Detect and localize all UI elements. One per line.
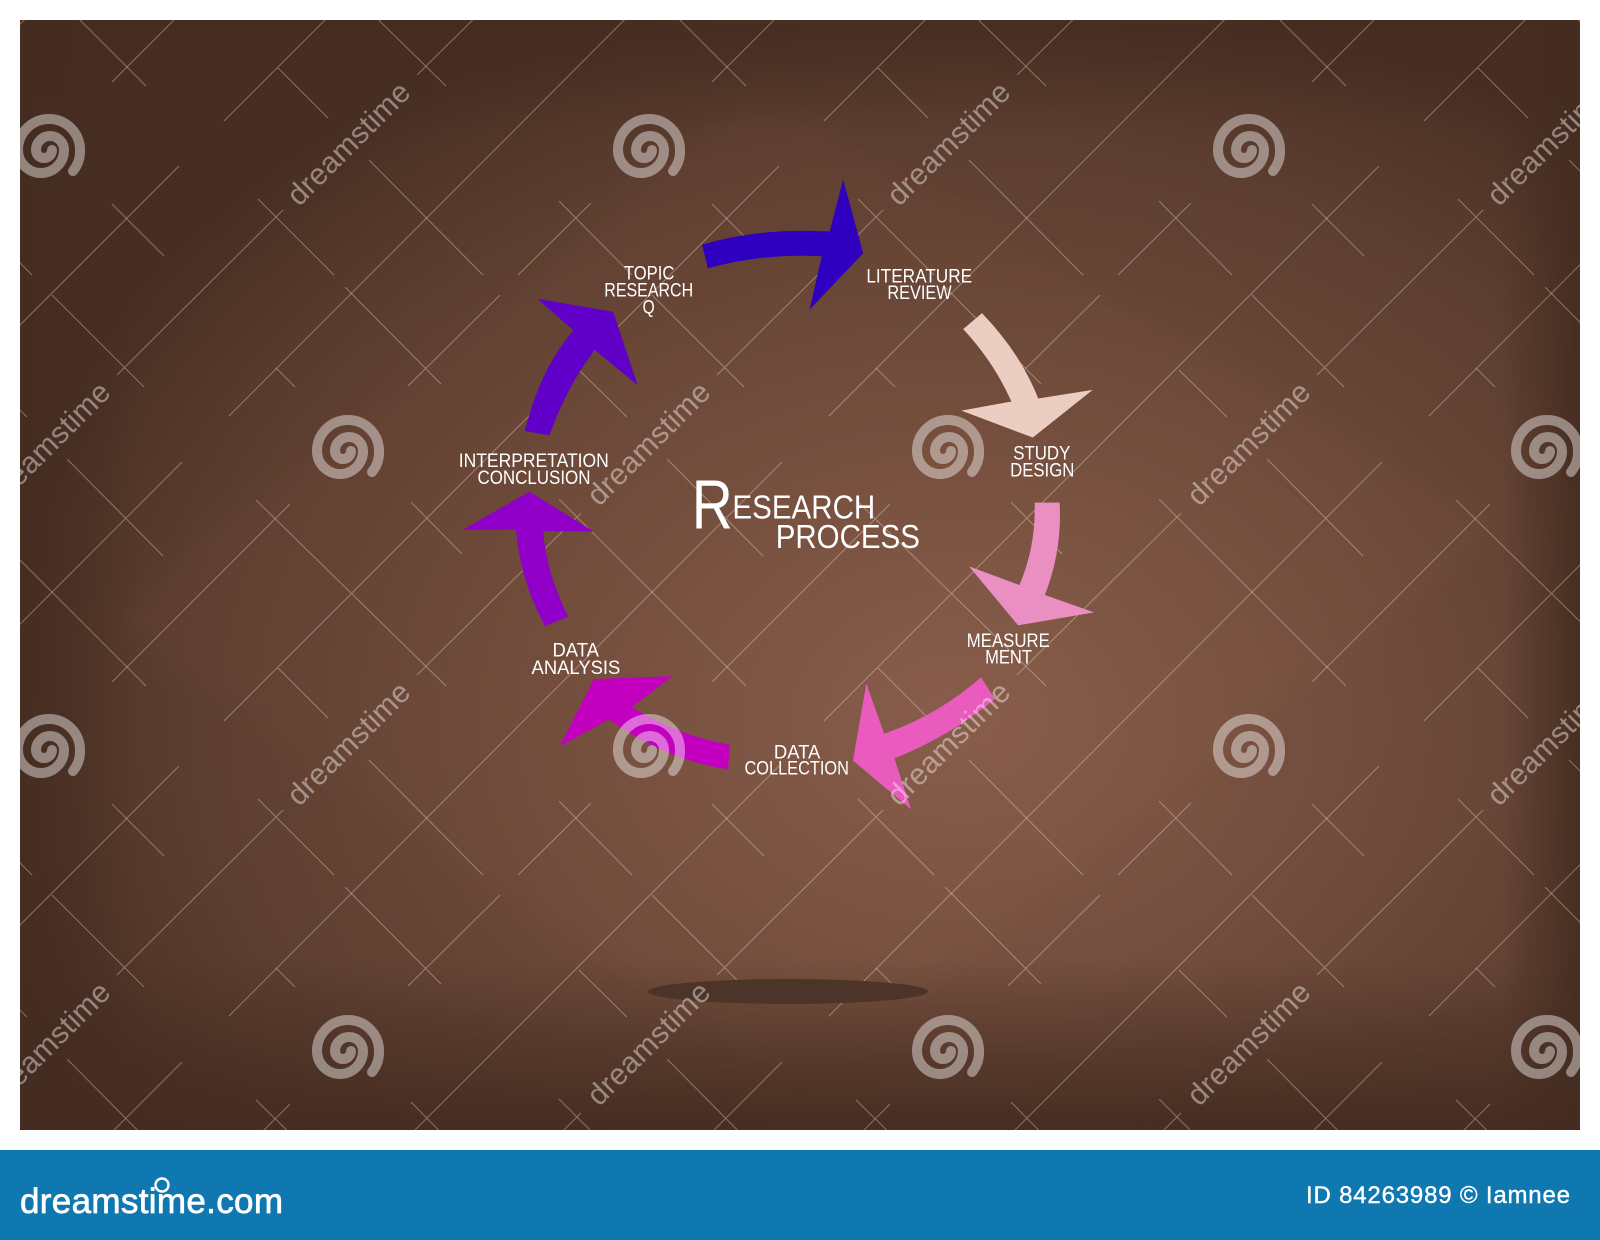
- arrow: data analysis to interpretation: [462, 492, 594, 626]
- label: literature review: LITERATURE: [866, 266, 972, 287]
- watermark: dreamstime text: dreamstime: [1181, 976, 1317, 1112]
- watermark: spirals: [18, 119, 1578, 1074]
- label: data analysis: [532, 640, 620, 679]
- label: literature review: [866, 266, 972, 304]
- footer logo spiral: [156, 1178, 168, 1192]
- label: interpretation conclusion: INTERPRETATION: [459, 450, 609, 472]
- label: literature review: REVIEW: [887, 282, 952, 304]
- label: data analysis: ANALYSIS: [532, 657, 620, 679]
- title: research process: [692, 466, 920, 556]
- label: topic research q: TOPIC: [624, 263, 674, 285]
- watermark: dreamstime text: dreamstime: [581, 976, 717, 1112]
- label: topic research q: Q: [643, 297, 655, 318]
- footer logo text: dreamstime.com: [20, 1182, 283, 1221]
- label: data collection: DATA: [774, 742, 821, 763]
- label: interpretation conclusion: CONCLUSION: [478, 467, 590, 489]
- watermark: dreamstime text: dreamstime: [881, 76, 1017, 212]
- label: data collection: COLLECTION: [744, 758, 849, 779]
- arrow: topic to literature review: [702, 180, 863, 310]
- footer bar: [0, 1150, 1600, 1240]
- watermark: dreamstime text: dreamstime: [581, 376, 717, 512]
- arrow: measurement to data collection: [853, 677, 995, 809]
- label: topic research q: RESEARCH: [604, 280, 693, 302]
- watermark: dreamstime text: dreamstime: [881, 676, 1017, 812]
- label: study design: STUDY: [1013, 443, 1070, 465]
- watermark: dreamstime text: dreamstime: [1181, 376, 1317, 512]
- arrow: literature review to study design: [961, 313, 1093, 438]
- footer image id and author: ID 84263989 © Iamnee: [1306, 1182, 1570, 1209]
- title: research process: PROCESS: [776, 519, 920, 556]
- label: measurement: MENT: [985, 647, 1032, 668]
- watermark: dreamstime text: dreamstime: [281, 76, 417, 212]
- label: topic research q: [604, 263, 693, 318]
- arrow: study design to measurement: [969, 503, 1094, 625]
- title: research process: R: [692, 466, 733, 543]
- label: measurement: MEASURE: [967, 630, 1050, 652]
- cycle diagram: [459, 180, 1094, 809]
- watermark: dreamstime text: dreamstime: [281, 676, 417, 812]
- label: study design: DESIGN: [1010, 460, 1074, 482]
- floating shadow: [648, 979, 928, 1004]
- label: study design: [1010, 443, 1074, 482]
- title: research process: ESEARCH: [732, 489, 875, 527]
- label: data analysis: DATA: [553, 640, 600, 661]
- label: interpretation conclusion: [459, 450, 609, 489]
- label: measurement: [967, 630, 1050, 668]
- arrow: interpretation to topic: [525, 299, 638, 435]
- label: data collection: [744, 742, 849, 779]
- arrow: data collection to data analysis: [560, 676, 730, 769]
